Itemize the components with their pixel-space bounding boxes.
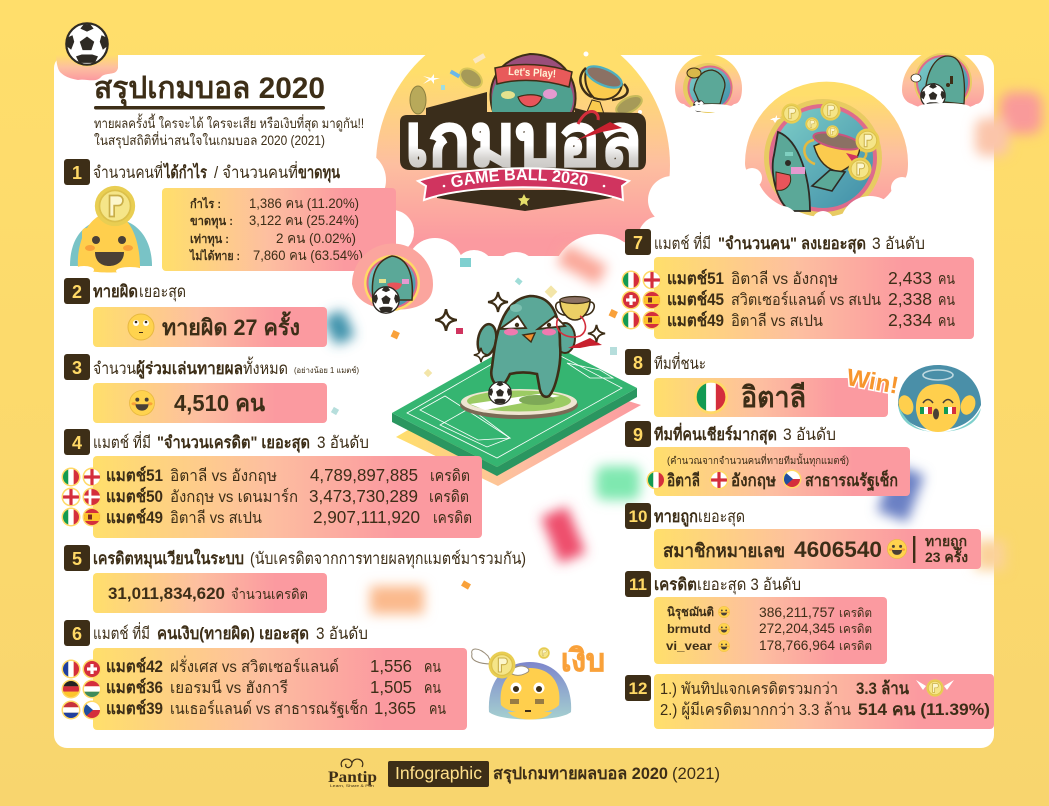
panel: top attendance (622, 257, 974, 339)
intro text: ในสรุปสถิติที่น่าสนใจในเกมบอล 2020 (2021) (94, 131, 325, 149)
panel: top attendance: 2,334 (888, 310, 932, 330)
panel: winner italy (654, 378, 888, 417)
heading 7: แมตช์ ที่มี (654, 232, 711, 253)
panel: top attendance: 2,433 (888, 268, 932, 288)
heading 4 (93, 431, 369, 453)
infographic tag: Infographic (395, 763, 482, 783)
heading 2: ทายผิด (93, 282, 138, 301)
footer (328, 759, 720, 788)
section 7: most people matches (622, 229, 974, 339)
mascot above logo (490, 54, 576, 118)
badge: crying mascot top right (902, 49, 984, 111)
panel: profit table: ขาดทุน : (190, 214, 233, 229)
panel: giveaway: 514 คน (11.39%) (858, 700, 990, 719)
section 6: most busted matches (62, 620, 605, 730)
section 10: most correct (625, 503, 981, 569)
panel: credit matches: 3,473,730,289 (309, 486, 418, 506)
badge 8 (625, 349, 651, 375)
section 1: profit and loss (64, 159, 396, 275)
section 5: circulating credits (64, 545, 526, 613)
football pitch (392, 334, 637, 476)
badge 1 (64, 159, 90, 185)
panel: circulating credits (93, 573, 327, 613)
badge 4: 4 (72, 433, 82, 453)
panel: top guesser: สมาชิกหมายเลข (663, 541, 785, 562)
mascot above logo: Let's Play! (508, 66, 556, 80)
panel: busted matches: ฝรั่งเศส vs สวิตเซอร์แลนด์ (170, 655, 339, 676)
heading 1 (93, 161, 341, 183)
panel: circulating credits: จำนวนเครดิต (231, 586, 308, 602)
panel: credit matches: อิตาลี vs สเปน (170, 509, 262, 527)
panel: cheered teams: อิตาลี (667, 470, 700, 490)
panel: credit matches: เครดิต (429, 489, 469, 506)
heading 10: ทายถูก (654, 508, 698, 528)
badge 9 (625, 421, 651, 447)
panel: top guesser (654, 529, 981, 569)
section 2: most wrong guesses (64, 278, 327, 347)
panel: credit matches (62, 456, 482, 538)
logo: เกมบอล game ball 2020 (400, 52, 646, 211)
pantip logo: Learn, Share & Fun (330, 783, 374, 788)
panel: giveaway (654, 674, 994, 729)
panel: top attendance: คน (938, 292, 955, 309)
icon: small trophy with ribbon (556, 296, 602, 348)
heading 4: 3 อันดับ (317, 434, 369, 452)
panel: credit ranking: brmutd (667, 622, 711, 636)
panel: profit table: 2 คน (0.02%) (276, 230, 356, 246)
pitch shadow (396, 400, 641, 486)
heading 7 (654, 232, 925, 254)
heading 3: ทั้งหมด (243, 356, 288, 378)
icon: stunned face with flying coin (472, 647, 571, 720)
panel: top guesser: 23 ครั้ง (925, 546, 968, 565)
panel: profit table: 3,122 คน (25.24%) (249, 212, 359, 228)
panel: top attendance: แมตช์51 (667, 268, 724, 288)
panel: busted matches: เยอรมนี vs ฮังการี (170, 679, 288, 697)
panel: profit table: กำไร : (190, 196, 221, 211)
heading 6: คนเงิบ(ทายผิด) เยอะสุด (157, 624, 309, 644)
heading 11: เครดิต (654, 575, 697, 594)
title: สรุปเกมบอล 2020 (94, 72, 325, 107)
heading 2 (93, 282, 186, 302)
badge 10: 10 (629, 507, 647, 526)
white main panel (54, 55, 994, 748)
intro text: ทายผลครั้งนี้ ใครจะได้ ใครจะเสีย หรือเงิบที่สุด มาดูกัน!! (94, 113, 364, 132)
panel: busted matches: คน (424, 659, 441, 676)
section 9: most cheered teams (625, 421, 910, 496)
panel: credit ranking (654, 597, 887, 664)
panel: participants (93, 383, 327, 423)
badge 9: 9 (633, 425, 643, 445)
heading 3: (อย่างน้อย 1 แมตช์) (294, 365, 359, 375)
panel: credit matches: เครดิต (430, 468, 470, 485)
heading 11 (654, 575, 801, 595)
heading 2: เยอะสุด (139, 283, 186, 302)
badge 12 (625, 675, 651, 701)
panel: participants: 4,510 คน (174, 390, 265, 416)
badge 12: 12 (629, 679, 647, 698)
panel: busted matches (62, 648, 467, 730)
heading 4: แมตช์ ที่มี (93, 431, 151, 452)
panel: profit table: 1,386 คน (11.20%) (249, 195, 359, 211)
section 4: most credits matches (62, 429, 482, 538)
badge 5 (64, 545, 90, 571)
heading 5 (93, 548, 526, 569)
pantip logo: Pantip (328, 769, 377, 786)
heading 8: ทีมที่ชนะ (654, 352, 706, 373)
panel: busted matches: แมตช์36 (106, 677, 163, 697)
badge 2 (64, 278, 90, 304)
heading 9 (654, 422, 836, 445)
icon: trophy (580, 62, 628, 114)
badge 7: 7 (633, 233, 643, 253)
panel: profit table: ไม่ได้ทาย : (188, 248, 240, 263)
panel: credit matches: เครดิต (433, 510, 472, 527)
panel: top attendance: แมตช์45 (667, 289, 724, 309)
label: เงิบ: เงิบ (561, 643, 605, 678)
heading 5: (นับเครดิตจากการทายผลทุกแมตช์มารวมกัน) (250, 549, 526, 569)
panel: credit matches: 4,789,897,885 (310, 465, 418, 485)
panel: winner italy: อิตาลี (741, 382, 806, 414)
panel: top attendance: 2,338 (888, 289, 932, 309)
footer title: สรุปเกมทายผลบอล 2020 (493, 765, 668, 784)
panel: cheered teams: (คำนวณจากจำนวนคนที่ทายทีมนั้นทุกแมตช์) (667, 453, 849, 467)
badge 5: 5 (72, 549, 82, 569)
heading 9: ทีมที่คนเชียร์มากสุด (654, 422, 777, 445)
heading 1: จำนวนคนที่ (93, 161, 163, 182)
badge: large trophy with coins (742, 82, 913, 256)
heading 3: จำนวน (93, 360, 136, 378)
heading 7: "จำนวนคน" ลงเยอะสุด (718, 235, 866, 254)
badge 11: 11 (629, 575, 647, 594)
icon: soccer ball with pink cloud (56, 22, 118, 80)
panel: credit matches: แมตช์49 (106, 507, 163, 527)
panel: wrong guesses: ทายผิด 27 ครั้ง (162, 311, 300, 340)
intro text (94, 113, 364, 149)
panel: wrong guesses (93, 307, 327, 347)
icon: confetti (331, 258, 618, 590)
panel: credit ranking: เครดิต (839, 639, 872, 653)
panel: busted matches: เนเธอร์แลนด์ vs สาธารณรัฐเช็ก (170, 698, 368, 718)
panel: busted matches: แมตช์39 (106, 698, 163, 718)
infographic tag (388, 761, 489, 787)
banner (416, 167, 631, 206)
heading 4: "จำนวนเครดิต" เยอะสุด (157, 433, 310, 453)
panel: top attendance: คน (938, 313, 955, 330)
badge 1: 1 (72, 163, 82, 183)
panel: credit ranking: 178,766,964 (759, 638, 835, 653)
panel: top attendance: คน (938, 271, 955, 288)
heading 6 (93, 622, 368, 644)
badge 3 (64, 354, 90, 380)
panel: cheered teams (646, 447, 910, 496)
heading 1: / จำนวนคนที่ (214, 161, 298, 182)
panel: busted matches: 1,556 (370, 656, 412, 676)
panel: top attendance: แมตช์49 (667, 310, 724, 330)
panel: top guesser: ทายถูก (925, 533, 967, 550)
panel: credit ranking: เครดิต (839, 606, 872, 620)
badge 6 (64, 620, 90, 646)
heading 1: ได้กำไร (162, 162, 207, 182)
panel: credit matches: 2,907,111,920 (313, 507, 420, 527)
section 11: most credits members (625, 571, 887, 664)
badge 2: 2 (72, 282, 82, 302)
panel: top guesser: 4606540 (794, 537, 882, 562)
panel: credit ranking: 386,211,757 (759, 605, 835, 620)
icon: coins and confetti (410, 52, 645, 118)
small badge: mascot with ball near center-left (352, 244, 433, 313)
heading 10 (654, 508, 745, 528)
panel: busted matches: 1,365 (374, 698, 416, 718)
panel: credit matches: อังกฤษ vs เดนมาร์ก (170, 487, 298, 506)
footer title: (2021) (672, 765, 720, 783)
blurred decorative blobs (323, 92, 1042, 614)
heading 9: 3 อันดับ (783, 426, 836, 444)
heading 11: เยอะสุด 3 อันดับ (697, 576, 801, 595)
heading 5: เครดิตหมุนเวียนในระบบ (93, 548, 244, 569)
badge 3: 3 (72, 358, 82, 378)
central mascot on football pitch (331, 258, 641, 590)
panel: busted matches: 1,505 (370, 677, 412, 697)
badge 4 (64, 429, 90, 455)
panel: giveaway: 3.3 ล้าน (856, 679, 909, 698)
icon: happy face with coin (70, 186, 152, 275)
section 8: winner (625, 349, 981, 432)
icon: football (489, 382, 511, 404)
panel: top attendance: สวิตเซอร์แลนด์ vs สเปน (731, 290, 881, 309)
central title dome (376, 55, 670, 256)
banner: GAME BALL 2020 (451, 169, 588, 187)
section 3: participants (64, 354, 359, 423)
heading 10: เยอะสุด (698, 508, 745, 527)
panel: profit table (162, 188, 396, 271)
panel: top attendance: อิตาลี vs สเปน (731, 312, 823, 330)
heading 7: 3 อันดับ (872, 235, 925, 253)
panel: credit matches: แมตช์50 (106, 486, 163, 506)
panel: cheered teams: อังกฤษ (731, 471, 776, 490)
heading 6: 3 อันดับ (316, 625, 368, 643)
heading 1: ขาดทุน (298, 164, 341, 183)
panel: credit matches: อิตาลี vs อังกฤษ (170, 467, 277, 485)
badge 11 (625, 571, 651, 597)
icon: sparkles (435, 292, 605, 362)
panel: giveaway: 2.) ผู้มีเครดิตมากกว่า 3.3 ล้าน (660, 701, 851, 720)
panel: credit ranking: vi_vear (666, 639, 712, 653)
panel: giveaway: 1.) พันทิปแจกเครดิตรวมกว่า (660, 681, 838, 698)
pantip logo (328, 759, 377, 788)
badge 8: 8 (633, 353, 643, 373)
panel: profit table: 7,860 คน (63.54%) (253, 247, 363, 263)
heading 6: แมตช์ ที่มี (93, 622, 150, 643)
label: win: Win! (845, 364, 901, 400)
badge 7 (625, 229, 651, 255)
panel: credit ranking: เครดิต (839, 622, 872, 636)
badge: trophy mascot top right (675, 54, 742, 113)
badge 6: 6 (72, 624, 82, 644)
panel: circulating credits: 31,011,834,620 (108, 585, 225, 603)
platform (460, 389, 578, 419)
panel: profit table: เท่าทุน : (190, 232, 229, 247)
heading 3: ผู้ร่วมเล่นทายผล (136, 360, 243, 380)
panel: credit ranking: 272,204,345 (759, 621, 835, 636)
badge 10 (625, 503, 651, 529)
panel: cheered teams: สาธารณรัฐเช็ก (805, 468, 898, 492)
section 12: giveaway summary (625, 674, 994, 729)
panel: busted matches: คน (429, 701, 446, 718)
panel: credit matches: แมตช์51 (106, 465, 163, 485)
logo: เกมบอล game ball 2020: เกมบอล (405, 101, 642, 181)
panel: busted matches: คน (424, 680, 441, 697)
mascot (475, 296, 575, 397)
panel: credit ranking: นิรุชฌันติ (667, 605, 714, 620)
heading 3 (93, 356, 359, 380)
icon: cheering face with halo (896, 365, 981, 432)
panel: busted matches: แมตช์42 (106, 656, 163, 676)
panel: top attendance: อิตาลี vs อังกฤษ (731, 270, 838, 288)
